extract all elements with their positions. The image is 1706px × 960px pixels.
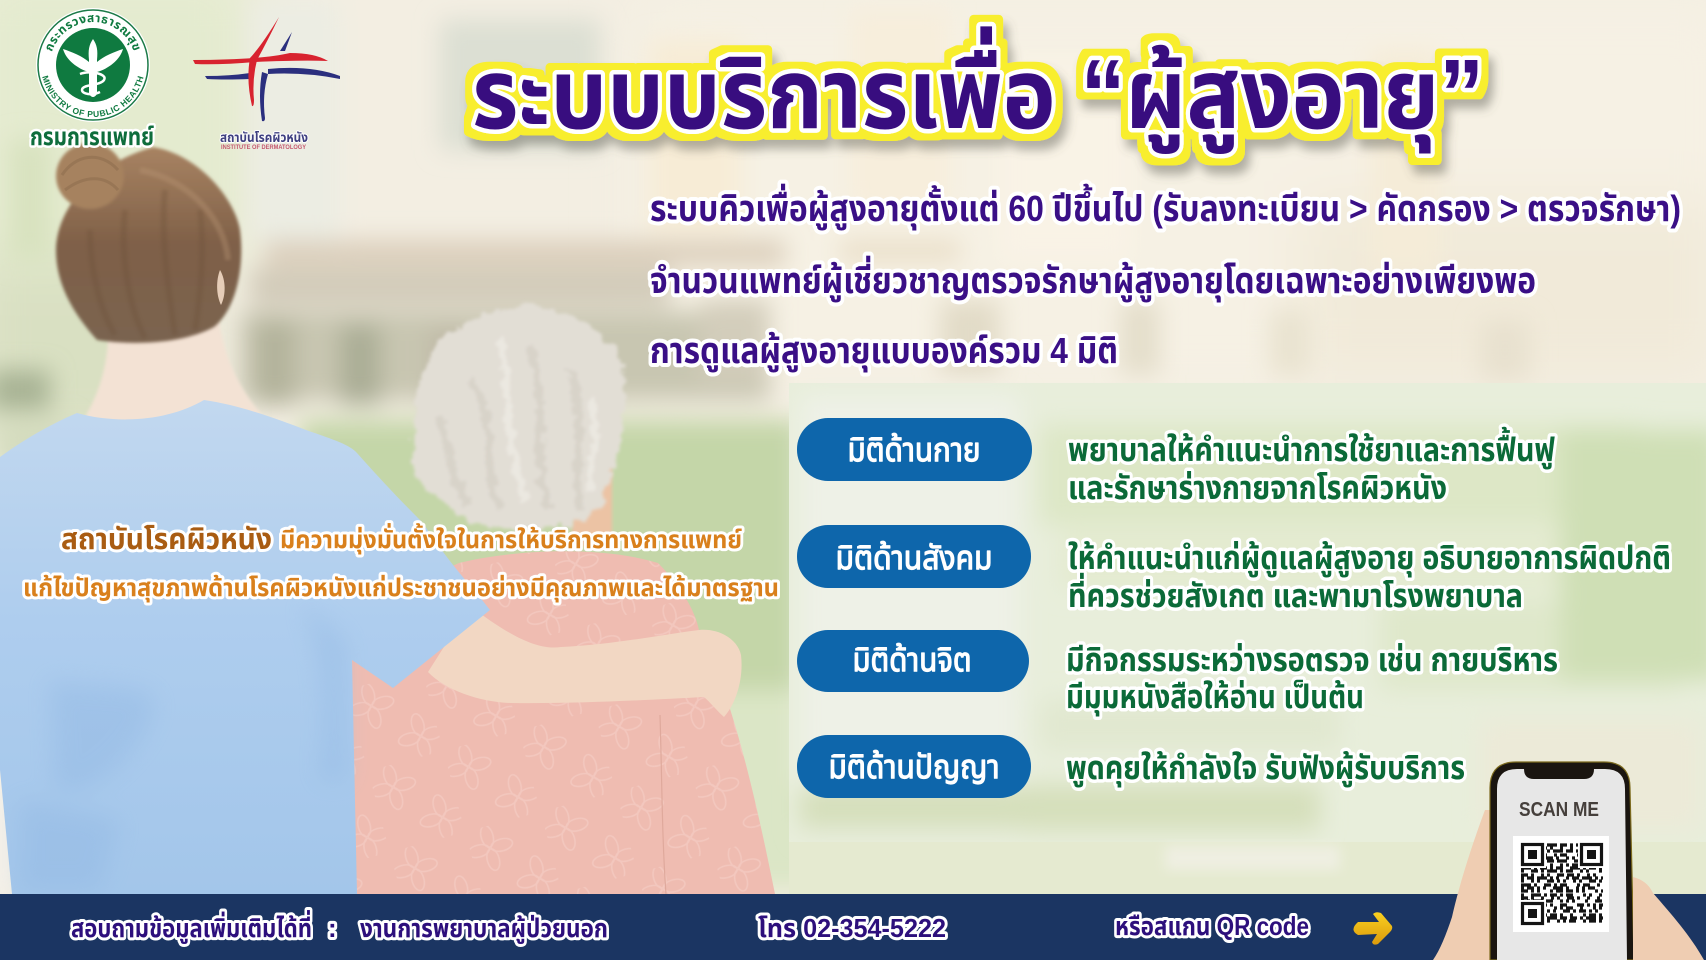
service: holistic care: การดูแลผู้สูงอายุแบบองค์รวม 4 มิติ (650, 330, 1118, 372)
mission statement: แก้ไขปัญหาสุขภาพด้านโรคผิวหนังแก่ประชาชนอย่างมีคุณภาพและได้มาตรฐาน (23, 574, 779, 603)
logo text: department: กรมการแพทย์ (30, 123, 154, 151)
footer contact text: : (328, 913, 337, 943)
dimension: intellectual (797, 735, 1465, 798)
logo: Ministry of Public Health: MINISTRY OF PUBLIC HEALTH (42, 76, 144, 117)
logo: Ministry of Public Health: กระทรวงสาธารณสุข (46, 15, 140, 52)
nurse hair (56, 147, 241, 343)
QR code (1513, 836, 1609, 932)
mission statement: มีความมุ่งมั่นตั้งใจในการให้บริการทางการแพทย์ (280, 523, 742, 555)
dimension: physical: และรักษาร่างกายจากโรคผิวหนัง (1068, 469, 1447, 506)
logo: Institute of Dermatology: INSTITUTE OF DERMATOLOGY (221, 145, 306, 151)
nurse hair bun (56, 143, 124, 209)
dimension: social: ที่ควรช่วยสังเกต และพามาโรงพยาบาล (1068, 572, 1523, 614)
footer contact text (71, 910, 1309, 944)
logo: Institute of Dermatology (193, 17, 340, 151)
dimension: intellectual: พูดคุยให้กำลังใจ รับฟังผู้รับบริการ (1066, 749, 1465, 788)
logo: Ministry of Public Health (36, 8, 150, 122)
photo: nurse and elderly woman (0, 143, 775, 894)
dimension: mental: มิติด้านจิต (852, 641, 972, 678)
dimension: intellectual: มิติด้านปัญญา (828, 748, 1000, 785)
footer contact text: โทร 02-354-5222 (758, 913, 946, 943)
nurse neck (80, 320, 262, 425)
dimension: mental (797, 630, 1558, 717)
left hand (1433, 810, 1500, 960)
elderly woman hair (412, 307, 624, 531)
right hand (1633, 877, 1704, 960)
mission statement (23, 523, 779, 603)
icon: yellow arrow (1354, 912, 1392, 945)
footer bar (0, 894, 1706, 960)
dimension: mental: มีมุมหนังสือให้อ่าน เป็นต้น (1066, 678, 1364, 717)
footer contact text: งานการพยาบาลผู้ป่วยนอก (360, 913, 608, 944)
logo: Institute of Dermatology: สถาบันโรคผิวหนัง (220, 130, 308, 145)
elderly woman top (347, 551, 775, 894)
elderly woman neck (572, 462, 612, 550)
phone with QR code (1433, 762, 1704, 960)
dimension: mental: มีกิจกรรมระหว่างรอตรวจ เช่น กายบริหาร (1066, 641, 1558, 678)
footer contact text: สอบถามข้อมูลเพิ่มเติมได้ที่ (71, 910, 312, 944)
footer contact text: หรือสแกน QR code (1115, 911, 1309, 941)
dimension: physical: มิติด้านกาย (848, 431, 980, 468)
nurse shirt (0, 400, 490, 894)
panel: translucent backdrop (789, 383, 1706, 894)
service list (650, 183, 1681, 372)
title: ระบบบริการเพื่อ “ผู้สูงอายุ” (472, 26, 1484, 154)
dimension: social: มิติด้านสังคม (836, 539, 992, 576)
dimension: social (797, 525, 1671, 614)
service: doctors: จำนวนแพทย์ผู้เชี่ยวชาญตรวจรักษาผู้สูงอายุโดยเฉพาะอย่างเพียงพอ (650, 255, 1536, 302)
mission statement: สถาบันโรคผิวหนัง (61, 524, 272, 556)
scan me label: SCAN ME (1519, 799, 1599, 821)
nurse arm (428, 606, 742, 717)
phone body (1490, 762, 1634, 960)
dimension: physical: พยาบาลให้คำแนะนำการใช้ยาและการฟื้นฟู (1068, 426, 1555, 470)
dimension: physical (797, 418, 1555, 506)
